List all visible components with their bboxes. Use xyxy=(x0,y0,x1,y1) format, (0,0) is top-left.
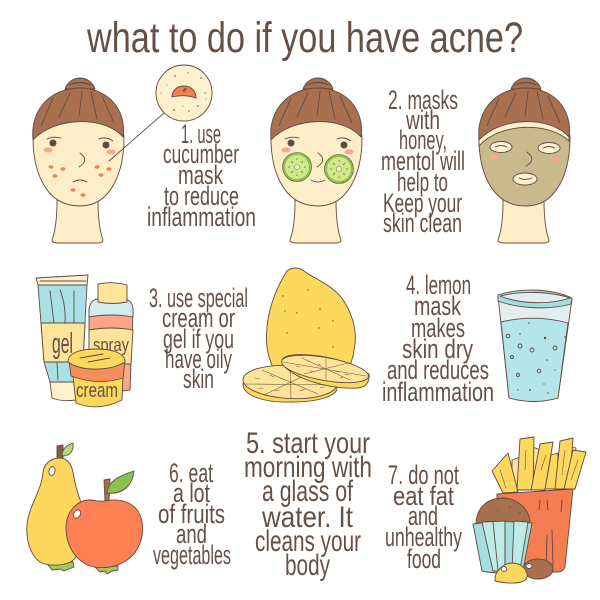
text: tip 2: Keep your xyxy=(383,188,462,218)
illustration: spray bottle: spray xyxy=(93,335,129,355)
text: tip 7: eat fat xyxy=(393,481,454,511)
text: tip 3: gel if you xyxy=(163,324,234,354)
text: tip 2: mentol will xyxy=(381,146,465,176)
text: tip 2: skin clean xyxy=(383,208,462,238)
text: tip 1: mask xyxy=(178,160,223,190)
illustration: face with cucumber slices xyxy=(271,78,362,243)
text: tip 7: and xyxy=(408,501,438,531)
illustration: muffin xyxy=(473,498,532,573)
text: tip 4: 4. lemon xyxy=(406,270,471,300)
illustration: gel tube xyxy=(36,275,88,401)
text: tip 3: cream or xyxy=(162,303,235,333)
callout: magnified pimple xyxy=(109,65,212,161)
text: tip 5: 5. start your xyxy=(246,427,370,460)
text: tip 5: cleans your xyxy=(255,525,361,558)
text: tip 4: skin dry xyxy=(402,334,473,364)
text: tip 7 xyxy=(385,460,462,574)
text: tip 5: water. It xyxy=(261,501,354,534)
text: tip 2 xyxy=(381,85,465,238)
text: tip 5 xyxy=(244,427,372,582)
text: tip 4 xyxy=(382,270,494,407)
text: tip 7: food xyxy=(407,544,441,574)
text: tip 6: and xyxy=(176,519,207,549)
illustration: french fries xyxy=(492,437,586,572)
illustration: cream jar: cream xyxy=(76,380,118,402)
illustration: lemon with slices xyxy=(242,268,370,402)
text: tip 4: inflammation xyxy=(382,377,494,407)
text: tip 2: with xyxy=(405,105,440,135)
text: tip 4: makes xyxy=(411,313,465,343)
text: tip 6: a lot xyxy=(173,478,210,508)
text: tip 6: 6. eat xyxy=(169,458,213,488)
text: tip 1: to reduce xyxy=(164,181,239,211)
text: tip 4: and reduces xyxy=(387,355,489,385)
illustration: pear xyxy=(27,443,84,571)
illustration: face with clay mask xyxy=(479,78,570,243)
text: tip 2: help to xyxy=(397,167,448,197)
text: tip 5: a glass of xyxy=(262,475,353,508)
text: tip 2: honey, xyxy=(399,125,447,155)
text: tip 1: cucumber xyxy=(163,139,239,169)
text: tip 6: of fruits xyxy=(158,499,225,529)
illustration: cream jar xyxy=(68,349,125,407)
illustration: face with acne xyxy=(33,78,124,243)
illustration: spray bottle xyxy=(89,283,133,394)
text: tip 1: 1. use xyxy=(181,119,221,149)
text: tip 4: mask xyxy=(414,291,461,321)
text: tip 7: unhealthy xyxy=(385,522,462,552)
text: tip 5: morning with xyxy=(244,451,372,484)
text: tip 6: vegetables xyxy=(153,540,231,570)
illustration: glass of water xyxy=(498,290,572,402)
text: tip 3: skin xyxy=(183,364,214,394)
text: tip 5: body xyxy=(285,549,330,582)
text: tip 3: 3. use special xyxy=(149,283,248,313)
text: tip 1 xyxy=(147,119,256,232)
text: tip 2: 2. masks xyxy=(388,85,458,115)
illustration: gel tube: gel xyxy=(52,328,73,360)
text: tip 1: inflammation xyxy=(147,202,256,232)
text: tip 6 xyxy=(153,458,231,570)
text: tip 3 xyxy=(149,283,248,394)
text: tip 7: 7. do not xyxy=(388,460,459,490)
text: tip 3: have oily xyxy=(165,344,232,374)
illustration: nuggets xyxy=(495,559,553,583)
illustration: apple xyxy=(66,471,143,574)
